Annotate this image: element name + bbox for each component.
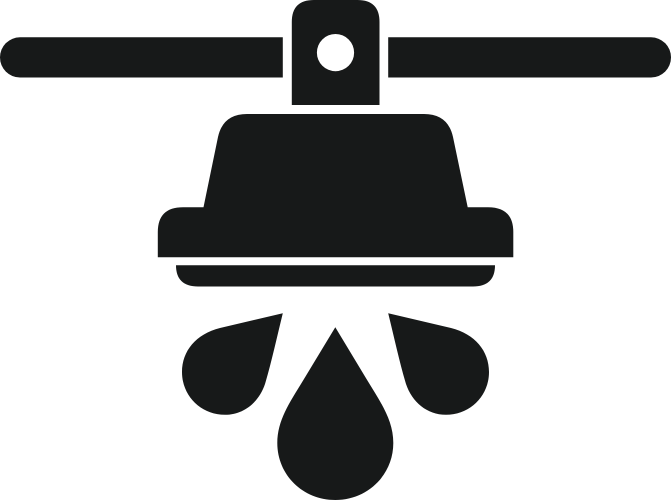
- sprinkler body: [158, 114, 513, 257]
- left water drop: [182, 313, 283, 415]
- pivot bracket with hole: [292, 0, 380, 105]
- center water drop: [277, 327, 393, 500]
- right pipe arm: [388, 37, 671, 78]
- deflector plate: [176, 265, 495, 286]
- right water drop: [388, 313, 489, 415]
- left pipe arm: [0, 37, 283, 78]
